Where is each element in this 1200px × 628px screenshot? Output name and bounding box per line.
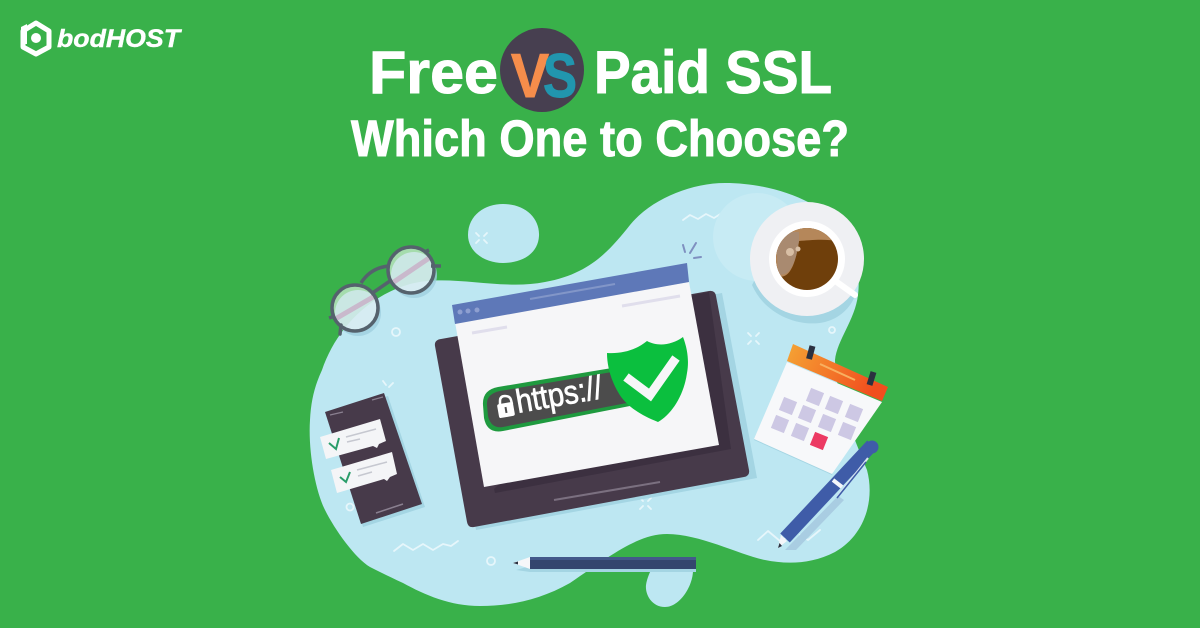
pencil bbox=[513, 557, 696, 572]
notification bubble 1 bbox=[320, 419, 386, 459]
badge: VS bbox=[500, 28, 584, 112]
address text: https:// bbox=[513, 368, 606, 420]
icon: green shield with check bbox=[607, 337, 688, 422]
blob: small top circle bbox=[468, 204, 539, 263]
decorative squiggles, rings and sparks bbox=[346, 210, 835, 565]
heading: Free: Free bbox=[369, 39, 498, 106]
calendar day squares bbox=[771, 388, 863, 450]
blob: small bottom drop bbox=[646, 568, 693, 607]
notification bubble 2 bbox=[331, 452, 397, 493]
heading: Paid SSL: Paid SSL bbox=[594, 39, 832, 106]
icon: padlock bbox=[497, 396, 515, 418]
browser header bar bbox=[452, 263, 689, 324]
calendar bbox=[754, 344, 888, 475]
icon: faint halo behind cup bbox=[713, 193, 801, 281]
badge: VS: V bbox=[511, 42, 549, 111]
sparks near browser bbox=[683, 243, 701, 258]
infographic canvas bbox=[20, 20, 888, 607]
calendar header bbox=[787, 344, 888, 401]
https address pill bbox=[483, 368, 635, 431]
tablet bbox=[435, 263, 757, 530]
title bbox=[351, 28, 849, 167]
pen bbox=[778, 440, 878, 550]
glasses bbox=[325, 247, 441, 336]
phone with notifications bbox=[320, 393, 425, 527]
badge: VS: S bbox=[543, 42, 577, 111]
logo wordmark: bodHOST bbox=[57, 25, 183, 53]
logo: bodHOST bbox=[21, 23, 183, 54]
blob: main light blue shape bbox=[310, 183, 870, 606]
subheading: Which One to Choose? bbox=[351, 110, 849, 167]
coffee cup on saucer bbox=[750, 202, 864, 323]
icon: hexagon logo mark bbox=[21, 23, 49, 54]
browser window bbox=[452, 263, 719, 487]
